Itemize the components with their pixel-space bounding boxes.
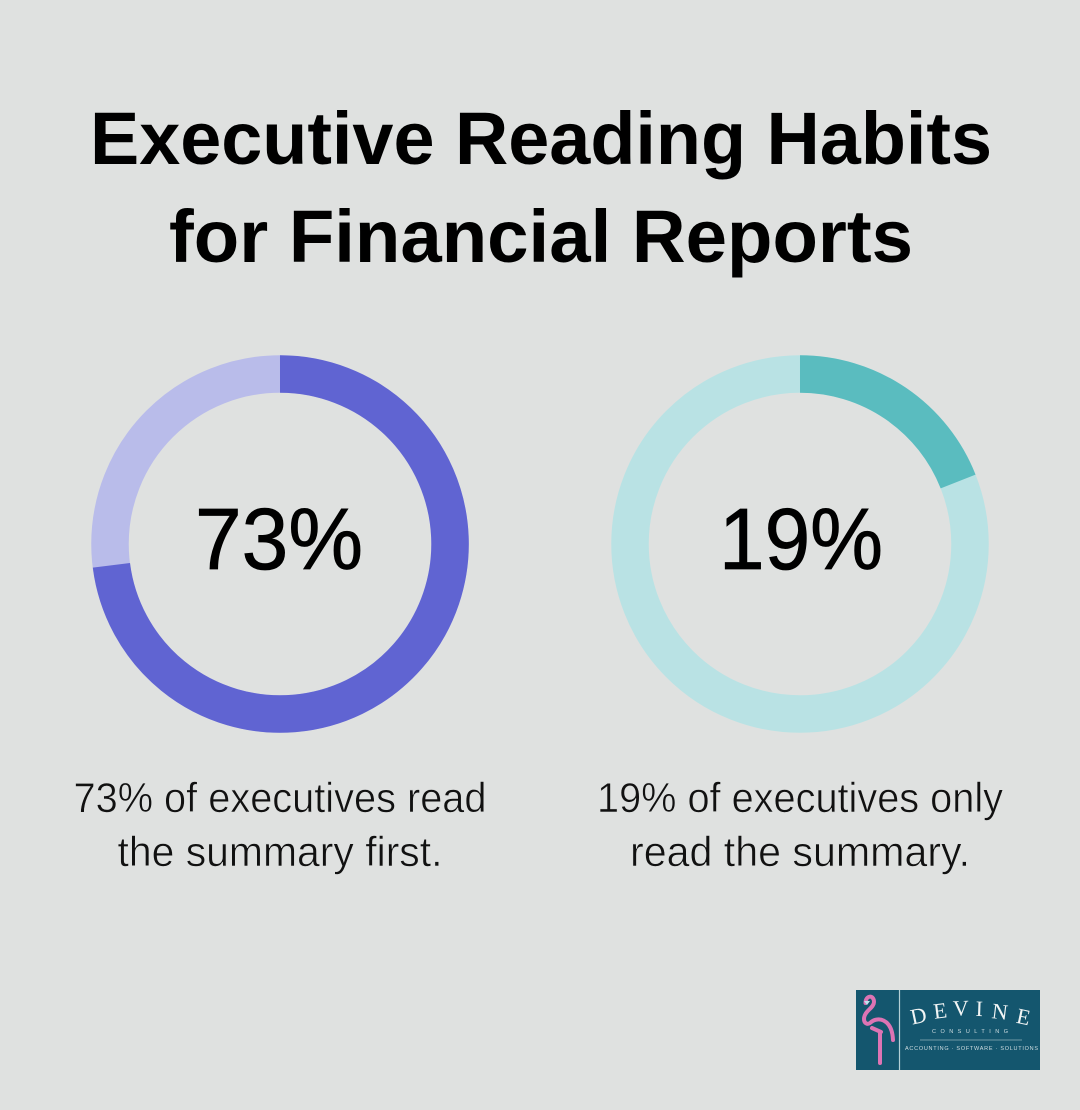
title: Executive Reading Habits <box>90 97 992 180</box>
caption: 19%: read the summary. <box>630 828 970 875</box>
tagline: services: ACCOUNTING · SOFTWARE · SOLUTIONS <box>905 1046 1038 1052</box>
tagline: consulting: CONSULTING <box>932 1029 1008 1035</box>
caption: 73%: the summary first. <box>118 828 442 875</box>
wordmark: DEVINE: V <box>952 995 969 1021</box>
donut chart: 19% <box>630 374 970 714</box>
wordmark: DEVINE: E <box>1014 1003 1033 1030</box>
wordmark: DEVINE: N <box>991 998 1009 1025</box>
logo: Devine Consulting <box>856 990 1040 1070</box>
value: 73%: 73% <box>195 491 363 588</box>
donut chart: 73% <box>110 374 450 714</box>
caption: 19% <box>597 774 1003 875</box>
title <box>90 97 992 278</box>
caption: 73% <box>74 774 486 875</box>
title: for Financial Reports <box>169 195 913 278</box>
wordmark: DEVINE <box>908 995 1033 1030</box>
caption: 73%: 73% of executives read <box>74 774 486 821</box>
wordmark: DEVINE: I <box>975 996 983 1021</box>
panel: 19% stat <box>597 374 1003 875</box>
caption: 19%: 19% of executives only <box>597 774 1003 821</box>
icon: flamingo <box>864 997 893 1063</box>
wordmark: DEVINE: D <box>908 1002 929 1030</box>
panel: 73% stat <box>74 374 486 875</box>
value: 19%: 19% <box>719 491 883 588</box>
wordmark: DEVINE: E <box>932 997 948 1024</box>
